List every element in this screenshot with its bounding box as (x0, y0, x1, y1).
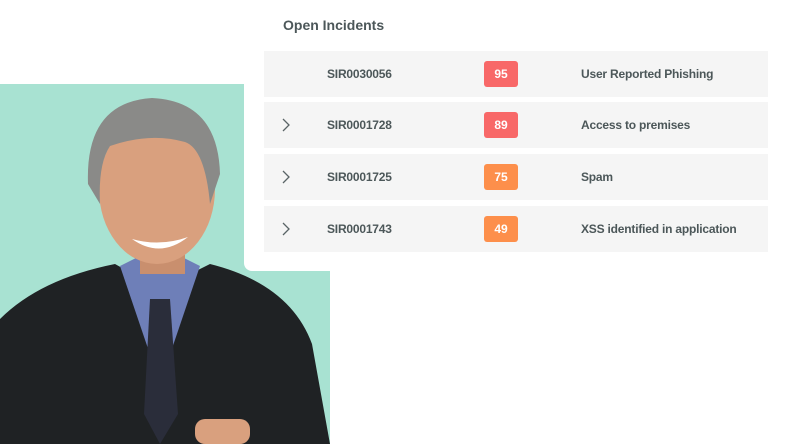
row 4 (264, 206, 768, 252)
row 2: 89 (494, 118, 508, 132)
row 4: XSS identified in application (581, 222, 737, 236)
row 3 (264, 154, 768, 200)
row 4: 49 (494, 222, 508, 236)
row 3: SIR0001725 (327, 170, 392, 184)
row 4: SIR0001743 (327, 222, 392, 236)
row 2 (264, 102, 768, 148)
row 2: Access to premises (581, 118, 690, 132)
white card (244, 0, 788, 271)
row 2: SIR0001728 (327, 118, 392, 132)
row 1 (264, 51, 768, 97)
heading: Open Incidents: Open Incidents (283, 17, 384, 33)
row 3: 75 (494, 170, 508, 184)
row 1: 95 (494, 67, 508, 81)
row 3: Spam (581, 170, 613, 184)
row 1: User Reported Phishing (581, 67, 713, 81)
row 1: SIR0030056 (327, 67, 392, 81)
person photo illustration (0, 98, 330, 444)
mint background panel (0, 84, 330, 444)
